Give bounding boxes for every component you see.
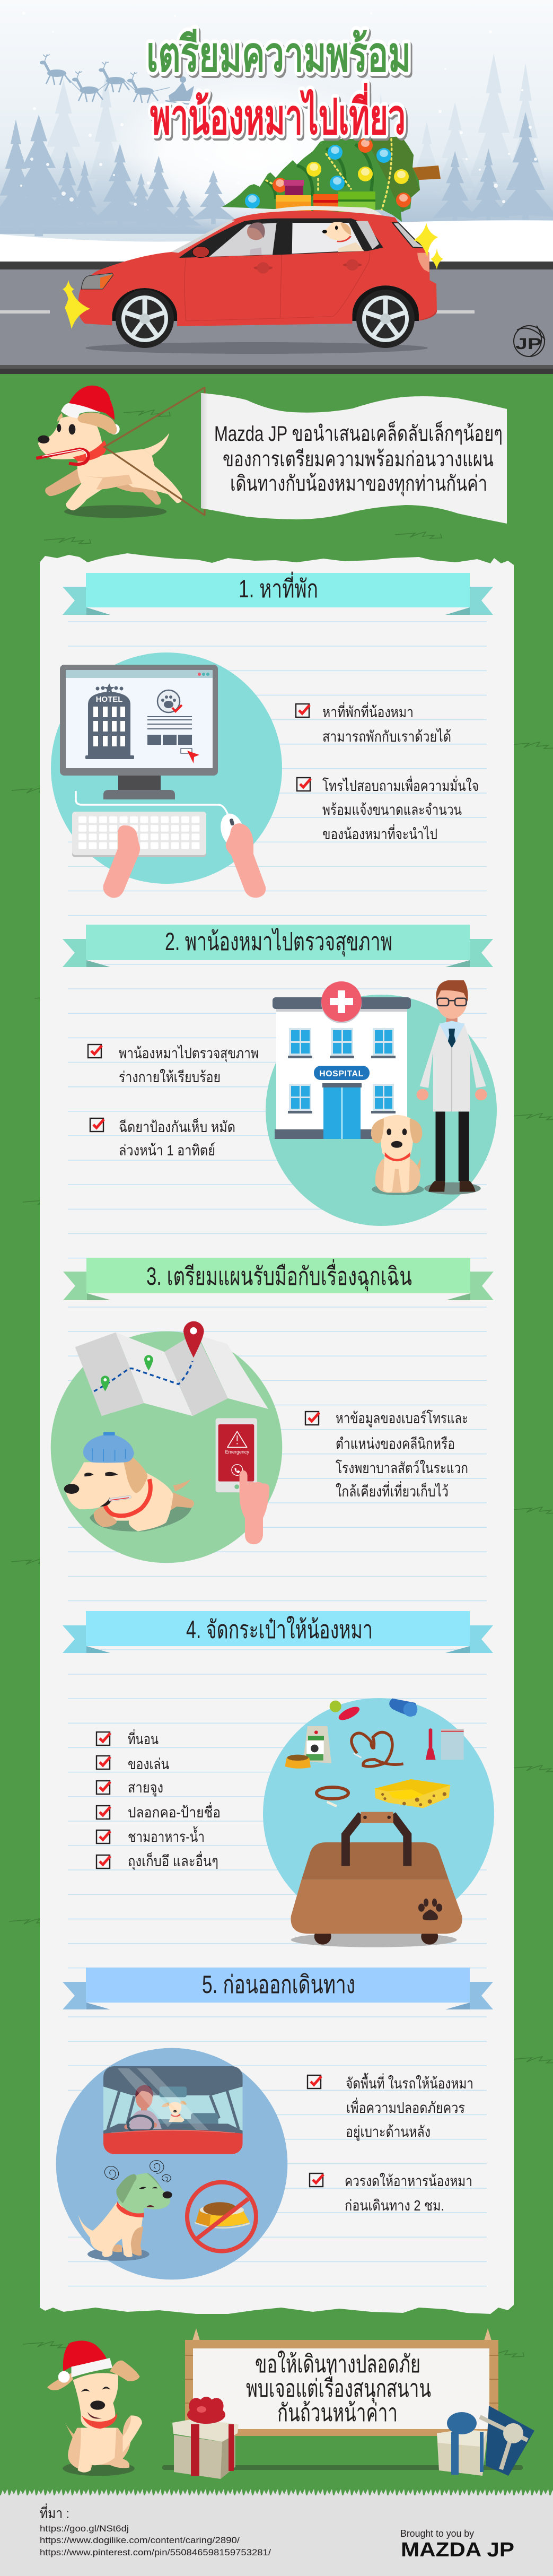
dizzy swirls: [104, 2161, 171, 2182]
teal circle: [51, 652, 282, 884]
credit: MAZDA JP: MAZDA JP: [401, 2539, 514, 2561]
headlight: [81, 273, 113, 289]
icon: gifts on roof: [276, 180, 375, 212]
pine forest: [0, 54, 553, 262]
section 3 illustration: map, sick dog, emergency phone: Emergency: [225, 1449, 250, 1455]
icon: roof rack: [257, 206, 383, 217]
icon: christmas tree on the roof: [222, 136, 441, 222]
section 2 checklist item 1: พาน้องหมาไปตรวจสุขภาพ: [119, 1045, 259, 1063]
sick dog: [90, 1505, 192, 1531]
icon: santa sleigh and reindeer: [40, 54, 194, 105]
section 4 heading ribbon: 4. จัดกระเป๋าให้น้องหมา: [186, 1615, 373, 1643]
section 3 illustration: map, sick dog, emergency phone: [51, 1321, 282, 1563]
section 4 illustration: packed items and travel bag: [263, 1698, 494, 1947]
icon: tennis ball: [330, 1701, 341, 1712]
section 1 illustration: booking a hotel on a computer: HOTEL: [96, 695, 122, 704]
wheels: [116, 290, 174, 348]
section 3 checklist item: ใกล้เคียงที่เที่ยวเก็บไว้: [336, 1481, 449, 1500]
icon: dog food bag and bowl: [303, 1726, 331, 1763]
section 4 checklist: ปลอกคอ-ป้ายชื่อ: [128, 1802, 221, 1821]
keyboard: [72, 812, 206, 857]
footer band: [0, 2487, 553, 2576]
door handles: [253, 266, 273, 270]
tree trunk: [406, 166, 441, 180]
section 2 checklist item 1: ร่างกายให้เรียบร้อย: [119, 1068, 221, 1085]
title line 1: เตรียมความพร้อม: [146, 28, 411, 82]
section 5 illustration: car, carsick dog, no food: [56, 2048, 287, 2279]
section 1 checklist item 1: หาที่พักที่น้องหมา: [322, 702, 414, 720]
intro dog with santa hat pulling banner: [36, 386, 205, 518]
section 4 checklist: ของเล่น: [128, 1756, 169, 1772]
hands: [103, 823, 266, 898]
mouse: [217, 811, 248, 849]
sign text: ขอให้เดินทางปลอดภัย: [255, 2350, 420, 2378]
car body: [78, 211, 437, 326]
doctor: [417, 980, 487, 1195]
section 3 checklist item: [305, 1409, 468, 1500]
cable: [76, 791, 229, 818]
section 4 heading ribbon: [63, 1611, 493, 1653]
source links: [40, 2523, 271, 2557]
icon: yellow sparkles: [63, 223, 443, 329]
section 1 heading ribbon: 1. หาที่พัก: [239, 571, 318, 603]
blue circle: [263, 1698, 494, 1929]
wooden sign: กันถ้วนหน้าค่าา: [277, 2399, 398, 2426]
car shadow: [85, 342, 428, 354]
travel bag: [291, 1812, 462, 1947]
section 5 checklist item 2: ก่อนเดินทาง 2 ชม.: [345, 2197, 444, 2214]
monitor: [60, 665, 218, 776]
section 2 heading ribbon: 2. พาน้องหมาไปตรวจสุขภาพ: [165, 927, 392, 957]
title line 2: พาน้องหมาไปเที่ยว: [152, 84, 407, 146]
hospital building: [276, 1008, 407, 1139]
section 5 checklist item 2: [310, 2172, 472, 2214]
section 5 heading ribbon: 5. ก่อนออกเดินทาง: [202, 1970, 355, 1998]
icon: collar: [317, 1787, 348, 1799]
road: [0, 262, 553, 374]
section 4 checklist: ชามอาหาร-น้ำ: [128, 1826, 205, 1845]
hospital sign: [314, 1066, 370, 1080]
windows frame: [180, 219, 383, 258]
section 2 illustration: hospital, doctor and dog: HOSPITAL: [319, 1069, 364, 1078]
section 1 checklist item 1: [296, 702, 451, 745]
section 1 checklist item 2: โทรไปสอบถามเพื่อความมั่นใจ: [322, 776, 479, 794]
section 5 checklist item 2: ควรงดให้อาหารน้องหมา: [345, 2172, 472, 2189]
icon: red car: [78, 211, 437, 348]
section 2 checklist item 2: ล่วงหน้า 1 อาทิตย์: [119, 1142, 215, 1159]
section 4 checklist: [96, 1729, 221, 1870]
title line 1: เตรียมความพร้อม: [148, 30, 412, 84]
pointing hand: [240, 1470, 269, 1544]
section 5 checklist item 1: จัดพื้นที่ ในรถให้น้องหมา: [346, 2073, 473, 2092]
icon: frisbee: [337, 1704, 362, 1723]
dog sitting: [371, 1115, 424, 1195]
section 3 heading ribbon: 3. เตรียมแผนรับมือกับเรื่องฉุกเฉิน: [146, 1259, 412, 1292]
map pins: [183, 1321, 204, 1357]
bowl with no-food sign: [195, 2222, 250, 2229]
driver: [247, 223, 265, 240]
section 4 checklist: ถุงเก็บอึ และอื่นๆ: [128, 1851, 218, 1870]
tree foliage: [222, 136, 420, 222]
section 1 checklist item 2: [297, 776, 479, 842]
wood boards: [185, 2340, 498, 2436]
post tips: [192, 2328, 491, 2340]
panel: torn notebook paper: [40, 553, 514, 2314]
green circle: [51, 1331, 282, 1563]
title line 2: [150, 82, 407, 146]
logo: JP globe: [514, 326, 545, 356]
dog passenger: [338, 242, 364, 252]
header: winter scene: [0, 0, 553, 374]
section 5 checklist item 1: อยู่เบาะด้านหลัง: [346, 2124, 431, 2141]
section 1 illustration: booking a hotel on a computer: [51, 652, 282, 898]
hospital door: [275, 1129, 323, 1139]
section 1 checklist item 2: ของน้องหมาที่จะนำไป: [322, 824, 437, 842]
hotel icon: [88, 692, 130, 757]
section 3 checklist item: หาข้อมูลของเบอร์โทรและ: [336, 1409, 468, 1428]
folded map: [75, 1333, 144, 1416]
notebook ruled lines: [68, 622, 487, 2286]
ornaments: [245, 145, 391, 208]
section 3 checklist item: ตำแหน่งของคลีนิกหรือ: [336, 1435, 455, 1452]
gift boxes with blue ribbons: [437, 2406, 534, 2476]
phone: [216, 1418, 257, 1492]
sources heading: ที่มา :: [40, 2503, 69, 2521]
section 4 checklist: ที่นอน: [128, 1729, 159, 1747]
section 2 checklist item 2: [90, 1118, 235, 1159]
section 1 heading ribbon: [63, 571, 493, 615]
mint circle: [266, 995, 497, 1226]
credit: Brought to you by: Brought to you by: [400, 2528, 474, 2539]
door seams: [185, 251, 370, 321]
title line 1: [146, 28, 412, 84]
title line 1: เตรียมความพร้อม: [146, 28, 411, 82]
wooden sign: [162, 2328, 523, 2470]
grass marks: [9, 410, 553, 2357]
wooden sign: พบเจอแต่เรื่องสนุกสนาน: [246, 2371, 431, 2404]
section 2 illustration: hospital, doctor and dog: [266, 980, 497, 1226]
section 2 checklist item 1: [88, 1045, 259, 1085]
intro banner: [201, 393, 507, 524]
tail light: [417, 253, 429, 272]
route: [94, 1361, 192, 1391]
section 2 checklist item 2: ฉีดยาป้องกันเห็บ หมัด: [119, 1118, 235, 1135]
section 5 checklist item 1: เพื่อความปลอดภัยควร: [346, 2098, 465, 2116]
falling snow: [20, 12, 537, 206]
icon: rolled blanket: [389, 1699, 417, 1716]
icon: dog bed: [375, 1779, 450, 1808]
source links: https://www.dogilike.com/content/caring/2890/: [40, 2535, 240, 2545]
icon: poop scoop: [429, 1728, 432, 1749]
source links: https://www.pinterest.com/pin/550846598159753281/: [40, 2547, 271, 2557]
title line 2: พาน้องหมาไปเที่ยว: [150, 82, 406, 144]
carsick dog: [87, 2248, 150, 2261]
section 5 checklist item 1: [308, 2073, 473, 2141]
snowy sky: [0, 0, 553, 262]
section 3 checklist item: โรงพยาบาลสัตว์ในระแวก: [336, 1459, 468, 1476]
section 1 checklist item 1: สามารถพักกับเราด้วยได้: [322, 728, 451, 745]
section 1 checklist item 2: พร้อมแจ้งขนาดและจำนวน: [322, 802, 462, 818]
paw badge and form: [157, 690, 180, 712]
section 5 heading ribbon: [63, 1968, 493, 2009]
closing happy dog with santa hat: [47, 2340, 142, 2476]
section 4 checklist: สายจูง: [128, 1779, 163, 1797]
logo: JP globe: JP: [515, 335, 542, 353]
title line 2: พาน้องหมาไปเที่ยว: [150, 82, 406, 144]
blue circle: [56, 2048, 287, 2279]
source links: https://goo.gl/NSt6dj: [40, 2523, 129, 2534]
gift box with red ribbon: [172, 2395, 239, 2479]
windshield view: [103, 2066, 243, 2154]
mirror: [192, 246, 209, 258]
icon: leash: [352, 1732, 403, 1766]
section 3 heading ribbon: [63, 1258, 494, 1300]
section 2 heading ribbon: [63, 925, 493, 967]
garlands: [266, 139, 392, 210]
icon: plastic bags: [441, 1729, 464, 1760]
ground shadow: [162, 2465, 523, 2470]
